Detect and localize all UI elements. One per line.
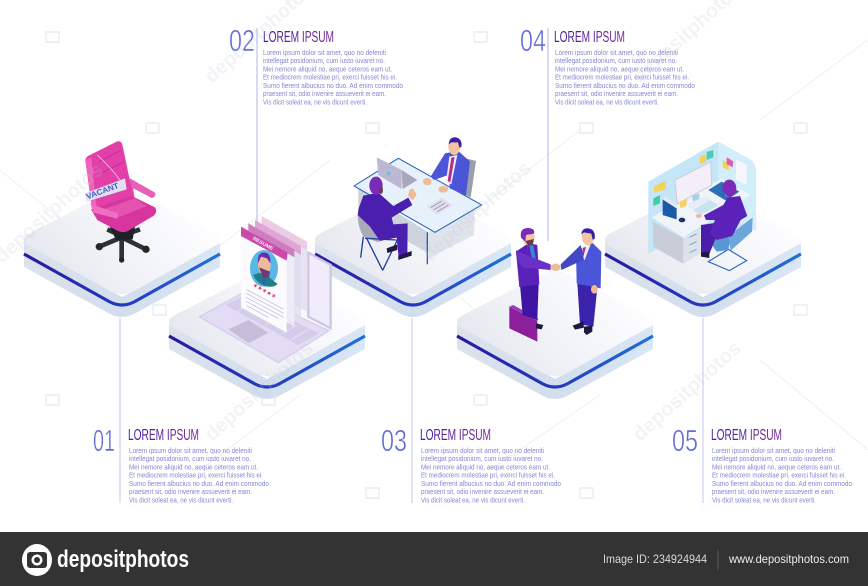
body 05: intellegat posidonium, cum iusto iuvaret no.: [712, 456, 834, 463]
body 04: Sumo fierent albucius no duo. Ad enim commodo: [555, 83, 695, 90]
man in blue suit: [561, 228, 601, 335]
heading 02: LOREM IPSUM: [263, 29, 334, 46]
body 03: praesent sit, odio invenire assueverit ei eam.: [421, 489, 544, 496]
body 02: [263, 50, 403, 106]
body 04: Et mediocrem molestiae pri, exerci fuisset his ei.: [555, 74, 689, 82]
resume pages: RESUME: [251, 236, 275, 252]
number 03: 03: [381, 423, 407, 458]
body 01: Sumo fierent albucius no duo. Ad enim commodo: [129, 481, 269, 488]
resume pages: ★★★★★: [251, 282, 277, 300]
body 04: Mei nemore aliquid no, aeque ceteros eam ut.: [555, 66, 684, 74]
platform 5: [605, 188, 801, 317]
footer logo: [22, 544, 189, 576]
seated employee: [696, 180, 753, 271]
body 02: Et mediocrem molestiae pri, exerci fuisset his ei.: [263, 74, 397, 82]
watermark: depositphotos: [629, 337, 746, 446]
body 02: Vis dicit soleat ea, ne vis dicunt everti.: [263, 100, 367, 106]
monitor: [675, 162, 719, 215]
body 04: Vis dicit soleat ea, ne vis dicunt everti.: [555, 100, 659, 106]
body 02: Lorem ipsum dolor sit amet, quo no deleniti: [263, 50, 386, 57]
platform 2: [169, 270, 365, 399]
heading 04: LOREM IPSUM: [554, 29, 625, 46]
number 02: 02: [229, 23, 255, 58]
platform 3: [315, 188, 511, 317]
body 02: Sumo fierent albucius no duo. Ad enim commodo: [263, 83, 403, 90]
laptop on desk: [377, 157, 417, 189]
clasped hands: [551, 264, 561, 271]
footer bar: [0, 532, 868, 586]
icon: job interview at desk: [354, 137, 482, 270]
candidate on chair: [358, 177, 417, 270]
icon: camera logo: [22, 544, 52, 576]
connector line 01: [119, 318, 121, 503]
icon: employee in cubicle: [648, 142, 756, 271]
body 05: Sumo fierent albucius no duo. Ad enim commodo: [712, 481, 852, 488]
body 03: Et mediocrem molestiae pri, exerci fuisset his ei.: [421, 472, 555, 480]
platform 4: [457, 270, 653, 399]
connector line 02: [256, 28, 258, 222]
body 01: intellegat posidonium, cum iusto iuvaret no.: [129, 456, 251, 463]
step 05 text block: [672, 423, 852, 504]
body 01: Mei nemore aliquid no, aeque ceteros eam ut.: [129, 464, 258, 472]
step 03 text block: [381, 423, 561, 504]
step 04 text block: [520, 23, 695, 106]
body 05: Mei nemore aliquid no, aeque ceteros eam ut.: [712, 464, 841, 472]
step 02 text block: [229, 23, 403, 106]
body 05: Et mediocrem molestiae pri, exerci fuisset his ei.: [712, 472, 846, 480]
desk: [652, 178, 751, 264]
body 02: intellegat posidonium, cum iusto iuvaret no.: [263, 58, 385, 65]
platform 1: [24, 188, 220, 317]
body 05: Lorem ipsum dolor sit amet, quo no deleniti: [712, 448, 835, 455]
body 01: praesent sit, odio invenire assueverit ei eam.: [129, 489, 252, 496]
interviewer: [423, 137, 476, 198]
heading 05: LOREM IPSUM: [711, 427, 782, 444]
heading 03: LOREM IPSUM: [420, 427, 491, 444]
icon: vacant office chair: VACANT: [85, 181, 120, 201]
body 05: praesent sit, odio invenire assueverit ei eam.: [712, 489, 835, 496]
icon: vacant office chair: [85, 141, 156, 263]
laptop: [199, 253, 331, 363]
body 04: Lorem ipsum dolor sit amet, quo no deleniti: [555, 50, 678, 57]
watermark lines and camera marks: [0, 32, 868, 498]
briefcase: [509, 305, 538, 342]
connector line 03: [411, 318, 413, 503]
desk: [354, 158, 482, 264]
body 03: [421, 448, 561, 504]
number 04: 04: [520, 23, 546, 58]
body 01: Lorem ipsum dolor sit amet, quo no deleniti: [129, 448, 252, 455]
watermark: depositphotos: [201, 337, 318, 446]
heading 01: LOREM IPSUM: [128, 427, 199, 444]
image id: Image ID: 234924944: [603, 552, 707, 566]
body 03: Lorem ipsum dolor sit amet, quo no deleniti: [421, 448, 544, 455]
body 03: Sumo fierent albucius no duo. Ad enim commodo: [421, 481, 561, 488]
body 02: praesent sit, odio invenire assueverit ei eam.: [263, 91, 386, 98]
body 01: Vis dicit soleat ea, ne vis dicunt everti.: [129, 498, 233, 504]
connector line 04: [547, 28, 549, 241]
body 04: intellegat posidonium, cum iusto iuvaret no.: [555, 58, 677, 65]
body 05: [712, 448, 852, 504]
body 03: Vis dicit soleat ea, ne vis dicunt everti.: [421, 498, 525, 504]
man with beard: [516, 228, 551, 329]
number 01: 01: [93, 423, 115, 458]
body 01: [129, 448, 269, 504]
body 05: Vis dicit soleat ea, ne vis dicunt everti.: [712, 498, 816, 504]
body 02: Mei nemore aliquid no, aeque ceteros eam ut.: [263, 66, 392, 74]
watermark: depositphotos: [419, 157, 536, 266]
icon: business handshake: [509, 228, 601, 342]
body 01: Et mediocrem molestiae pri, exerci fuisset his ei.: [129, 472, 263, 480]
number 05: 05: [672, 423, 698, 458]
resume pages: [241, 216, 307, 333]
body 04: [555, 50, 695, 106]
watermark: [0, 0, 746, 446]
body 03: Mei nemore aliquid no, aeque ceteros eam ut.: [421, 464, 550, 472]
footer logo: depositphotos: [57, 546, 189, 573]
connector line 05: [702, 318, 704, 503]
body 03: intellegat posidonium, cum iusto iuvaret no.: [421, 456, 543, 463]
binders and cup: [663, 197, 687, 222]
cubicle panels: [648, 142, 756, 253]
website: www.depositphotos.com: [728, 552, 849, 566]
footer divider: [717, 550, 719, 570]
body 04: praesent sit, odio invenire assueverit ei eam.: [555, 91, 678, 98]
icon: laptop and resume: [199, 216, 331, 363]
step 01 text block: [93, 423, 269, 504]
